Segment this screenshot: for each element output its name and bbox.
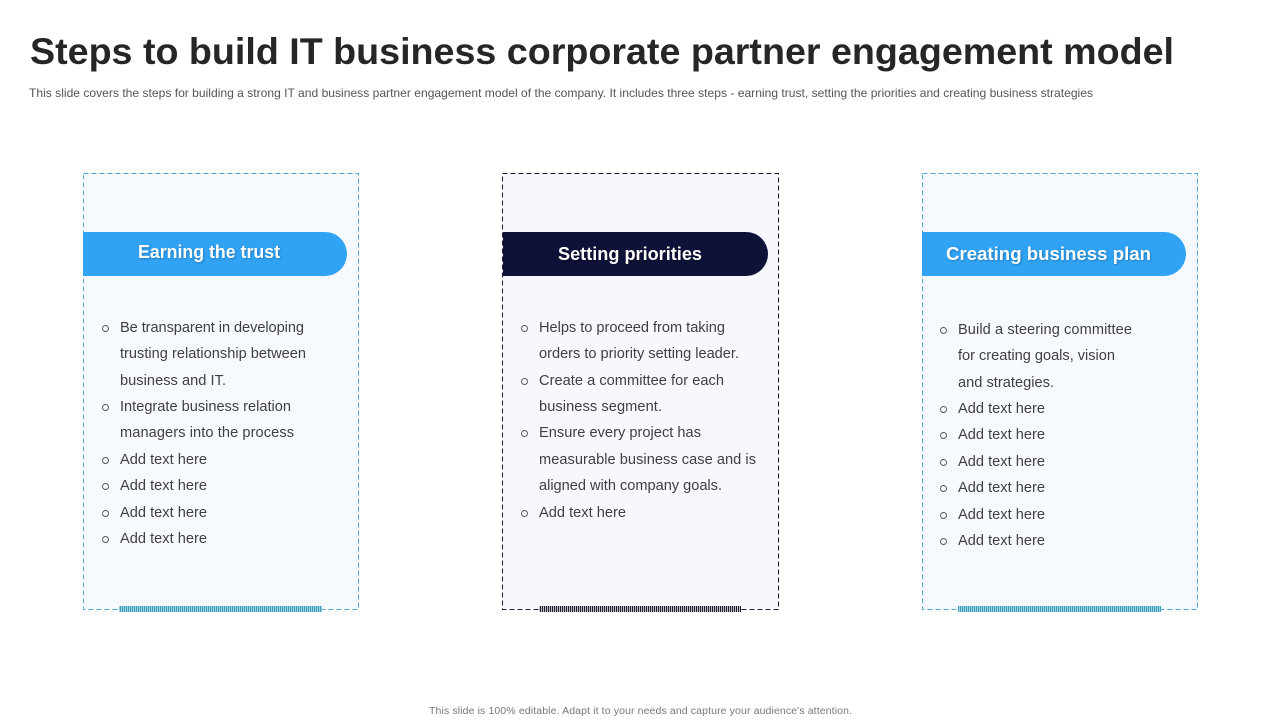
heading pill bbox=[83, 232, 347, 276]
bullet list: trusting relationship between bbox=[120, 346, 306, 362]
bullet list: Add text here bbox=[120, 478, 207, 494]
heading: Setting priorities bbox=[558, 244, 702, 264]
heading: Creating business plan bbox=[946, 244, 1151, 264]
bullet list: Add text here bbox=[958, 454, 1045, 470]
bullet list: Build a steering committee bbox=[958, 322, 1132, 338]
panel: setting priorities bbox=[502, 174, 778, 612]
heading pill bbox=[503, 232, 768, 276]
panel: creating business plan bbox=[922, 174, 1198, 612]
subtitle: This slide covers the steps for building a strong IT and business partner engagement model of the company. It includes three steps - earning trust, setting the priorities and creating business strategies bbox=[29, 86, 1093, 100]
card bottom hatch bbox=[539, 606, 741, 612]
card bottom hatch bbox=[119, 606, 322, 612]
card background bbox=[922, 174, 1198, 610]
bullet list: Be transparent in developing bbox=[120, 320, 304, 336]
bullet list: business segment. bbox=[539, 399, 662, 415]
bullet list: orders to priority setting leader. bbox=[539, 346, 739, 362]
bullet list bbox=[940, 322, 1132, 549]
bullet list: Add text here bbox=[958, 427, 1045, 443]
heading: Earning the trust bbox=[138, 242, 280, 262]
bullet list: Add text here bbox=[120, 452, 207, 468]
bullet list: Add text here bbox=[958, 480, 1045, 496]
bullet list: aligned with company goals. bbox=[539, 478, 722, 494]
bullet list: and strategies. bbox=[958, 375, 1054, 391]
bullet list: Helps to proceed from taking bbox=[539, 320, 725, 336]
bullet list: for creating goals, vision bbox=[958, 348, 1115, 364]
bullet list: Create a committee for each bbox=[539, 373, 724, 389]
bullet list: Add text here bbox=[120, 505, 207, 521]
bullet list bbox=[522, 320, 756, 521]
bullet list bbox=[102, 320, 306, 547]
card background bbox=[502, 174, 778, 610]
card background bbox=[84, 174, 358, 610]
footer note: This slide is 100% editable. Adapt it to your needs and capture your audience's attention. bbox=[429, 705, 852, 717]
bullet list: Integrate business relation bbox=[120, 399, 291, 415]
title: Steps to build IT business corporate partner engagement model bbox=[30, 31, 1174, 72]
bullet list: measurable business case and is bbox=[539, 452, 756, 468]
card bottom hatch bbox=[958, 606, 1161, 612]
bullet list: Add text here bbox=[539, 505, 626, 521]
bullet list: Ensure every project has bbox=[539, 425, 701, 441]
bullet list: business and IT. bbox=[120, 373, 226, 389]
panel: earning the trust bbox=[83, 174, 358, 612]
bullet list: Add text here bbox=[958, 401, 1045, 417]
bullet list: Add text here bbox=[958, 533, 1045, 549]
bullet list: Add text here bbox=[120, 531, 207, 547]
heading pill bbox=[922, 232, 1186, 276]
bullet list: managers into the process bbox=[120, 425, 294, 441]
bullet list: Add text here bbox=[958, 507, 1045, 523]
